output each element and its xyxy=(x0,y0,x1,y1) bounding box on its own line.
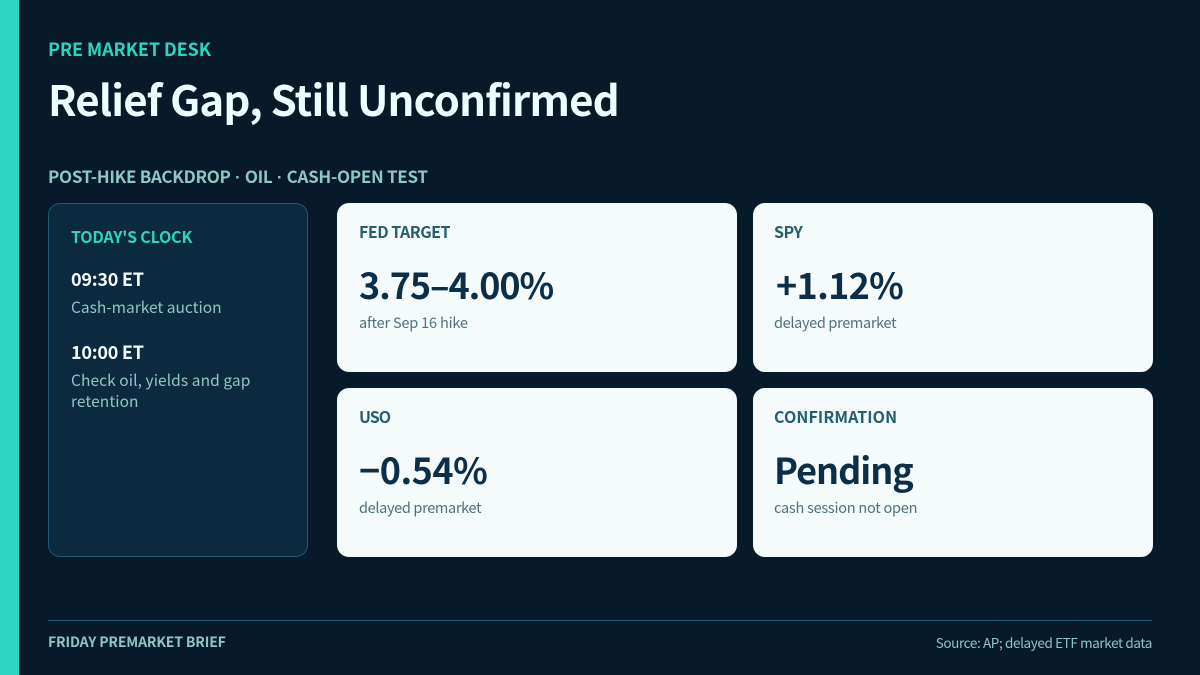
card: confirmation xyxy=(753,388,1153,557)
second event xyxy=(71,369,250,412)
card: spy xyxy=(753,203,1153,372)
second time: 10:00 ET xyxy=(71,339,144,365)
value: 3.75–4.00% xyxy=(359,258,553,310)
value: +1.12% xyxy=(776,258,903,310)
value: −0.54% xyxy=(359,443,487,495)
subtitle: POST-HIKE BACKDROP · OIL · CASH-OPEN TEST xyxy=(48,163,428,188)
label: USO xyxy=(359,404,390,428)
note: after Sep 16 hike xyxy=(359,312,468,333)
card: fed target xyxy=(337,203,737,372)
title: Relief Gap, Still Unconfirmed xyxy=(48,68,619,129)
footer left: FRIDAY PREMARKET BRIEF xyxy=(48,632,226,652)
note: cash session not open xyxy=(774,497,917,518)
footer rule xyxy=(48,620,1152,621)
note: delayed premarket xyxy=(359,497,481,518)
accent bar xyxy=(0,0,19,675)
second event: Check oil, yields and gap xyxy=(71,369,250,391)
label: SPY xyxy=(774,219,802,243)
footer source: Source: AP; delayed ETF market data xyxy=(936,632,1152,652)
first time: 09:30 ET xyxy=(71,266,144,292)
eyebrow: PRE MARKET DESK xyxy=(48,36,211,62)
label: CONFIRMATION xyxy=(774,404,897,428)
second event: retention xyxy=(71,390,139,412)
card: uso xyxy=(337,388,737,557)
value: Pending xyxy=(774,443,913,495)
note: delayed premarket xyxy=(774,312,896,333)
panel: today's clock xyxy=(48,203,308,557)
first event: Cash-market auction xyxy=(71,296,222,318)
label: FED TARGET xyxy=(359,219,450,243)
clock heading: TODAY'S CLOCK xyxy=(71,224,192,248)
